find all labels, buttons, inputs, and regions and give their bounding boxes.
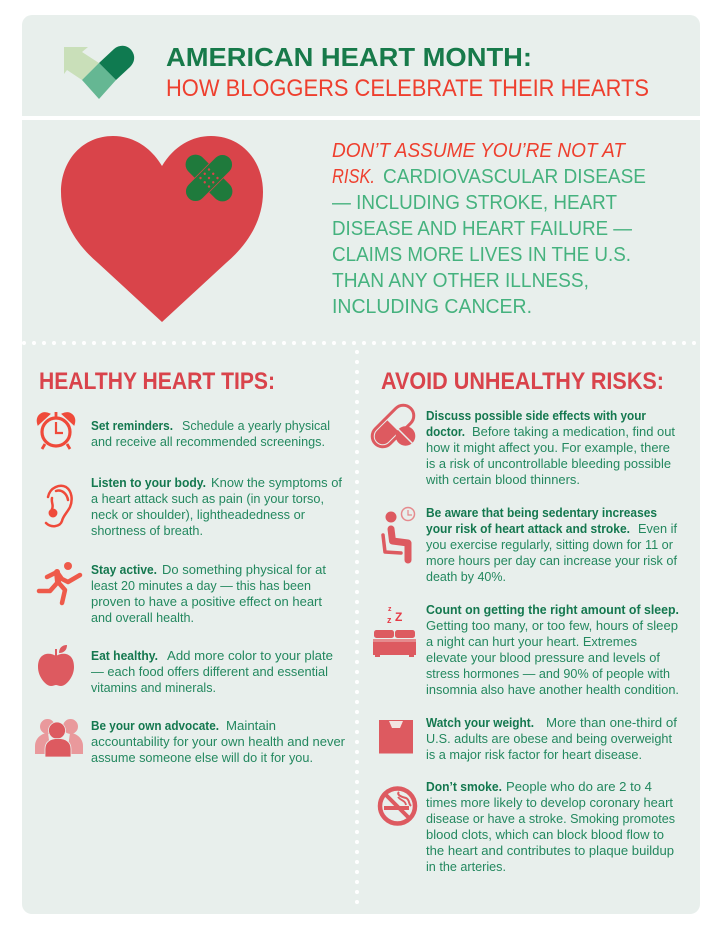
icon: ear	[46, 486, 72, 526]
tip: listen to your body: neck or shoulder), lightheadedness or	[91, 507, 306, 522]
icon: bandage	[168, 137, 250, 219]
tip: eat healthy: Eat healthy.	[91, 648, 158, 663]
icon: bed with z letters: Z	[395, 610, 402, 624]
tip: listen to your body: Listen to your body.	[91, 475, 206, 490]
risk: smoking: blood clots, which can block blood flow to	[426, 827, 664, 842]
intro paragraph: CLAIMS MORE LIVES IN THE U.S.	[332, 243, 631, 266]
risk: side effects: is a risk of uncontrollable bleeding possible	[426, 456, 671, 471]
icon: no smoking	[380, 788, 415, 824]
icon: bed with z letters	[373, 606, 416, 657]
tip: be your own advocate: Be your own advocate.	[91, 718, 219, 733]
icon: runner	[39, 562, 80, 603]
risk: sedentary: you exercise regularly, sitting down for 11 or	[426, 537, 674, 552]
tip: set reminders: Set reminders.	[91, 418, 173, 433]
risk: side effects: with certain blood thinners.	[425, 472, 580, 487]
tip: eat healthy: vitamins and minerals.	[91, 680, 216, 695]
icon: bed with z letters: z	[388, 606, 392, 613]
tip: eat healthy	[91, 648, 333, 695]
intro paragraph: CARDIOVASCULAR DISEASE	[383, 165, 646, 188]
risk: sedentary: death by 40%.	[426, 569, 506, 584]
panel: healthy heart tips	[35, 368, 346, 765]
tip: eat healthy: Add more color to your plate	[167, 648, 333, 663]
tip: stay active: Stay active.	[91, 562, 157, 577]
icon: apple	[38, 645, 74, 686]
intro paragraph: DISEASE AND HEART FAILURE —	[332, 217, 632, 240]
icon: alarm clock	[37, 412, 75, 449]
tip: be your own advocate	[91, 718, 346, 765]
risk: sleep: Count on getting the right amount of sleep.	[426, 602, 679, 617]
header	[64, 42, 649, 102]
risk: weight: More than one-third of	[546, 715, 677, 730]
risk: side effects	[425, 408, 675, 487]
risk: smoking: times more likely to develop coronary heart	[426, 795, 673, 810]
tip: set reminders: and receive all recommended screenings.	[91, 434, 325, 449]
tip: be your own advocate: Maintain	[226, 718, 276, 733]
icon: pills	[368, 401, 418, 451]
risk: sleep: elevate your blood pressure and levels of	[426, 650, 660, 665]
tip: stay active: least 20 minutes a day — this has been	[91, 578, 311, 593]
risk: weight: U.S. adults are obese and being overweight	[426, 731, 672, 746]
risk: sedentary	[426, 505, 677, 584]
risk: sleep	[426, 602, 679, 697]
risk: smoking: the heart and contributes to plaque buildup	[426, 843, 674, 858]
tip: stay active: and overall health.	[91, 610, 194, 625]
risk: smoking: Don’t smoke.	[426, 779, 502, 794]
icon: weight scale	[379, 720, 413, 754]
title	[166, 42, 649, 102]
tip: eat healthy: — each food offers different and essential	[91, 664, 328, 679]
risk: sedentary: your risk of heart attack and stroke.	[426, 521, 630, 536]
intro paragraph: INCLUDING CANCER.	[332, 295, 532, 318]
risk: sedentary: more hours per day can increase your risk of	[426, 553, 677, 568]
intro paragraph: — INCLUDING STROKE, HEART	[332, 191, 617, 214]
title: HOW BLOGGERS CELEBRATE THEIR HEARTS	[166, 75, 649, 102]
intro paragraph: RISK.	[332, 165, 375, 188]
risk: smoking: disease or have a stroke. Smoking promotes	[426, 811, 675, 826]
risk: smoking: in the arteries.	[426, 859, 506, 874]
heading: tips: HEALTHY HEART TIPS:	[39, 368, 275, 395]
risk: smoking	[426, 779, 675, 874]
risk: sleep: stress hormones — and 90% of people with	[426, 666, 670, 681]
risk: sedentary: Be aware that being sedentary increases	[426, 505, 657, 520]
icon: heart with bandage	[61, 136, 263, 322]
risk: sleep: insomnia also have another health condition.	[426, 682, 679, 697]
tip: stay active	[91, 562, 326, 625]
tip: listen to your body: Know the symptoms of	[211, 475, 342, 490]
tip: be your own advocate: assume someone else will do it for you.	[91, 750, 313, 765]
tip: set reminders: Schedule a yearly physical	[182, 418, 330, 433]
heading: risks: AVOID UNHEALTHY RISKS:	[381, 368, 664, 395]
risk: sleep: a night can hurt your heart. Extremes	[426, 634, 637, 649]
tip: be your own advocate: accountability for your own health and never	[91, 734, 346, 749]
risk: weight: Watch your weight.	[426, 715, 534, 730]
title: AMERICAN HEART MONTH:	[166, 42, 532, 72]
icon: people	[35, 719, 83, 757]
icon: heart check logo	[64, 46, 134, 99]
risk: side effects: Before taking a medication, find out	[472, 424, 675, 439]
risk: side effects: Discuss possible side effects with your	[426, 408, 646, 423]
risk: weight: is a major risk factor for heart disease.	[426, 747, 642, 762]
tip: stay active: Do something physical for at	[162, 562, 326, 577]
risk: sleep: Getting too many, or too few, hours of sleep	[426, 618, 678, 633]
icon: seated person with clock	[383, 508, 414, 560]
risk: side effects: doctor.	[426, 424, 465, 439]
tip: set reminders	[91, 418, 330, 449]
risk: smoking: People who do are 2 to 4	[506, 779, 652, 794]
intro paragraph	[332, 139, 646, 318]
tip: listen to your body: shortness of breath.	[91, 523, 203, 538]
risk: side effects: how it might affect you. For example, there	[426, 440, 670, 455]
panel: avoid unhealthy risks	[368, 368, 679, 874]
risk: sedentary: Even if	[638, 521, 677, 536]
intro paragraph: DON’T ASSUME YOU’RE NOT AT	[332, 139, 626, 162]
icon: bed with z letters: z	[387, 615, 392, 625]
risk: weight	[426, 715, 677, 762]
intro paragraph: THAN ANY OTHER ILLNESS,	[332, 269, 589, 292]
tip: listen to your body: a heart attack such as pain (in your torso,	[91, 491, 324, 506]
tip: listen to your body	[91, 475, 342, 538]
tip: stay active: proven to have a positive effect on heart	[91, 594, 322, 609]
